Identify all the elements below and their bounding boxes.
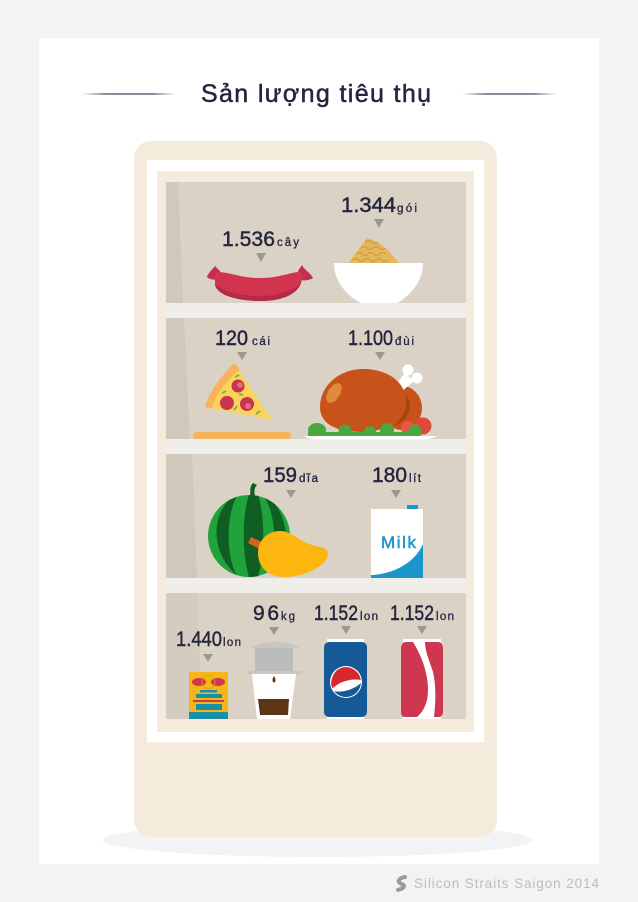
- icon: Pepsi can: [324, 639, 367, 719]
- label: 159 dĩa: [263, 464, 319, 498]
- label: 1.536 cây: cây: [277, 237, 299, 249]
- fridge shadow: [103, 823, 533, 857]
- label: 1.152 lon (Coke): 1.152: [390, 602, 434, 625]
- label: 1.344 gói: [341, 194, 417, 228]
- label: 96 kg: kg: [281, 611, 295, 623]
- icon: noodle bowl: [334, 238, 423, 303]
- label: 1.100 đùi: đùi: [395, 336, 414, 348]
- icon: sausage: [207, 265, 313, 301]
- icon: milk carton: Milk: [381, 533, 416, 552]
- icon: coffee filter and cup: [247, 642, 302, 719]
- label: 159 dĩa: dĩa: [299, 473, 319, 485]
- label: 1.152 lon (Coke): lon: [436, 611, 454, 623]
- icon: yellow tea box: [189, 672, 228, 719]
- label: 1.152 lon (Pepsi): [314, 602, 378, 634]
- footer credit: Silicon Straits Saigon 2014: [414, 876, 599, 891]
- icon: mango: [248, 531, 328, 577]
- label: 1.440 lon: 1.440: [176, 628, 222, 651]
- fridge: [134, 141, 497, 837]
- label: 1.536 cây: 1.536: [222, 228, 275, 251]
- label: 1.344 gói: gói: [397, 203, 417, 215]
- label: 96 kg: 96: [253, 602, 279, 625]
- icon: pizza slice: [205, 363, 272, 420]
- icon: pizza board: [193, 432, 291, 439]
- label: 159 dĩa: 159: [263, 464, 297, 487]
- title: Sản lượng tiêu thụ: [201, 80, 431, 108]
- label: 180 lít: [372, 464, 422, 498]
- label: 120 cái: cái: [252, 336, 270, 348]
- label: 1.100 đùi: [348, 327, 414, 360]
- label: 1.344 gói: 1.344: [341, 194, 396, 217]
- icon: milk carton: [371, 505, 423, 578]
- label: 96 kg: [253, 602, 295, 635]
- label: 1.152 lon (Coke): [390, 602, 454, 634]
- label: 180 lít: 180: [372, 464, 407, 487]
- icon: roast turkey: [304, 364, 437, 440]
- label: 1.440 lon: lon: [223, 637, 241, 649]
- label: 1.440 lon: [176, 628, 241, 662]
- icon: Coke can: [401, 639, 443, 719]
- label: 120 cái: [215, 327, 270, 360]
- label: 120 cái: 120: [215, 327, 248, 350]
- label: 1.536 cây: [222, 228, 299, 262]
- icon: watermelon: [208, 483, 290, 578]
- label: 180 lít: lít: [409, 473, 422, 485]
- label: 1.100 đùi: 1.100: [348, 327, 393, 350]
- label: 1.152 lon (Pepsi): 1.152: [314, 602, 358, 625]
- label: 1.152 lon (Pepsi): lon: [360, 611, 378, 623]
